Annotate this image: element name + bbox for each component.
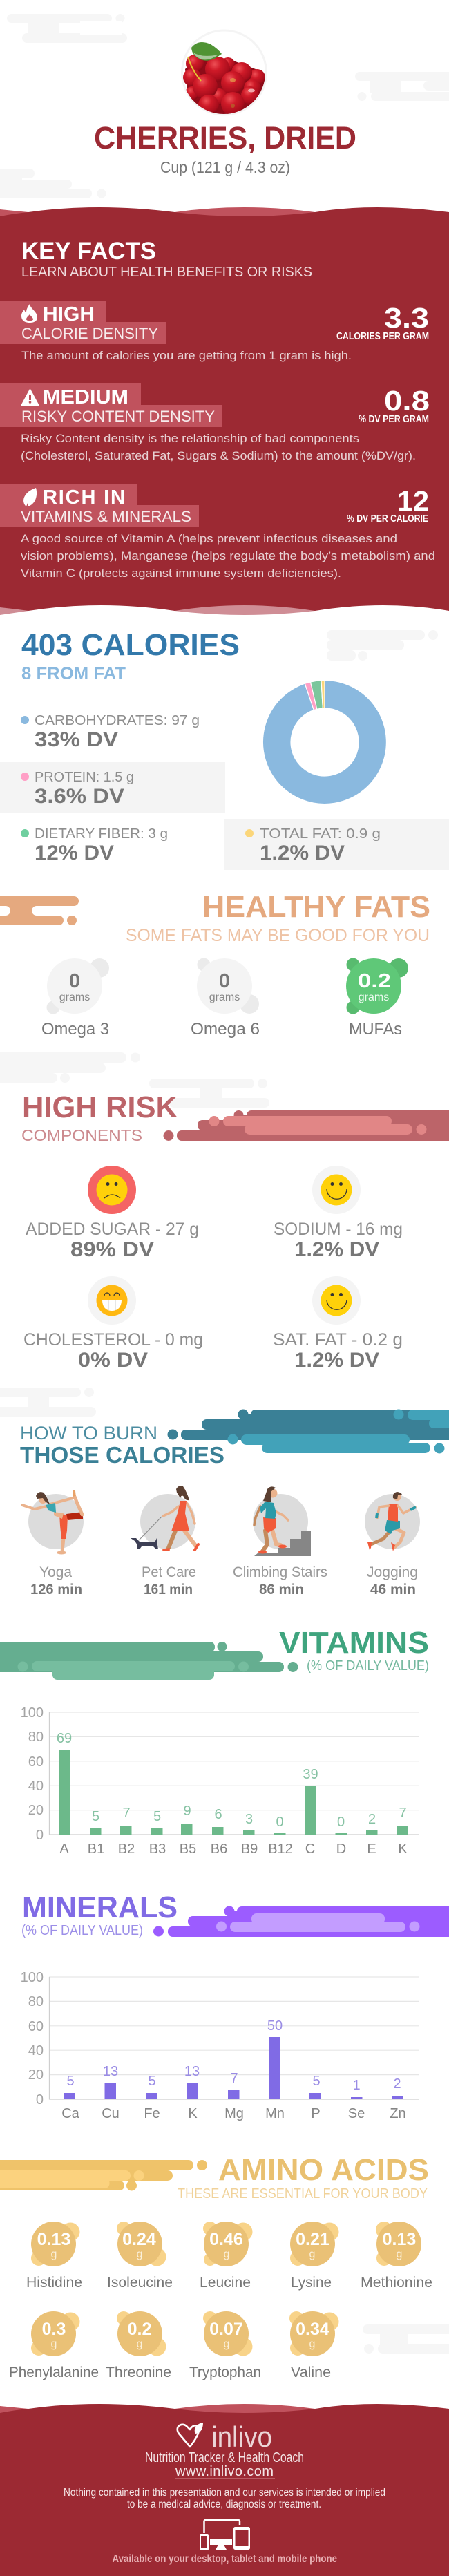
activity label: jogging [367,1564,418,1598]
amino acid: phenylalanine: g [51,2338,57,2350]
activity label: climbing stairs: Climbing Stairs [233,1564,327,1580]
fact: rich in vitamins and minerals: % DV PER CALORIE [347,513,428,524]
bar chart: minerals: 5 [66,2074,75,2089]
availability note: Available on your desktop, tablet and mobile phone [112,2553,337,2565]
fat item: MUFAs [346,958,408,1039]
fact: rich in vitamins and minerals: 12 [397,485,429,517]
legend: protein: PROTEIN: 1.5 g [35,770,134,785]
bar chart: minerals: Zn [390,2106,406,2121]
fact: calorie density: CALORIES PER GRAM [336,331,429,342]
heading: amino acids: AMINO ACIDS [218,2153,429,2187]
bar chart: minerals [21,1970,419,2121]
bar chart: vitamins: 5 [153,1809,161,1824]
risk item: added sugar: 89% DV [70,1238,154,1261]
amino acid: valine [289,2311,338,2380]
icon: flame [21,304,37,323]
amino acid: phenylalanine: 0.3 [42,2320,66,2339]
heading: key facts: KEY FACTS [21,238,156,265]
bar chart: vitamins: 7 [399,1806,407,1821]
activity: pet care [131,1486,198,1551]
bar chart: minerals: 60 [28,2019,44,2034]
fact: rich in vitamins and minerals: A good source of Vitamin A (helps prevent infectious diseases and [21,532,397,545]
bar chart: vitamins: 0 [337,1815,345,1830]
icon: desktop, tablet and phone [200,2520,250,2550]
heading: high risk: HIGH RISK [22,1090,178,1124]
disclaimer: to be a medical advice, diagnosis or treatment. [127,2499,321,2510]
fat item: omega 6 [191,958,260,1039]
fat item: omega 3 [41,958,109,1039]
bar chart: vitamins: E [367,1841,376,1857]
bar chart: vitamins: 5 [92,1809,99,1824]
heading: those calories: THOSE CALORIES [20,1442,224,1468]
subheading: calories from fat: 8 FROM FAT [21,664,126,683]
subheading: components: COMPONENTS [21,1126,142,1144]
amino acid: lysine: g [309,2248,315,2260]
subheading: minerals percent of daily value: (% OF DAILY VALUE) [21,1923,143,1938]
risk item: cholesterol: 0% DV [78,1349,148,1372]
tagline: Nutrition Tracker & Health Coach [145,2450,304,2465]
legend: dietary fiber [21,826,168,864]
fact: risky content density: Risky Content density is the relationship of bad components [21,432,359,445]
bar chart: vitamins: B6 [211,1841,227,1857]
amino acid: tryptophan: g [224,2338,229,2350]
subheading: key facts: LEARN ABOUT HEALTH BENEFITS OR RISKS [21,265,312,280]
bar chart: vitamins: 7 [122,1806,131,1821]
fact: calorie density: HIGH [43,303,95,325]
icon: leaf [23,488,37,506]
bar chart: minerals: Mg [224,2106,244,2121]
amino acid: lysine: Lysine [291,2275,332,2291]
fat item: MUFAs: 0.2 [358,970,391,992]
amino acid: leucine: 0.46 [209,2230,243,2249]
amino acid: leucine [200,2222,253,2291]
panel: key facts [0,207,449,615]
bar chart: minerals: Cu [102,2106,120,2121]
activity: climbing stairs [253,1486,311,1556]
fact: rich in vitamins and minerals: vision problems), Manganese (helps regulate the body’s metabolism) and [21,549,435,562]
fact: risky content density: % DV PER GRAM [359,414,429,425]
fat item: omega 3: Omega 3 [41,1020,109,1039]
fat item: MUFAs: grams [359,992,389,1003]
amino acid: tryptophan [189,2311,261,2380]
fact: rich in vitamins and minerals [0,484,435,580]
legend: total fat: 1.2% DV [260,842,345,864]
donut chart: macronutrients [262,680,386,804]
bar chart: vitamins: 0 [36,1828,44,1843]
legend: protein: 3.6% DV [35,785,124,808]
bar chart: minerals: P [311,2106,321,2121]
fact: rich in vitamins and minerals: Vitamin C (protects against immune system deficiencies). [21,567,341,580]
heading: calories: 403 CALORIES [21,628,240,662]
disclaimer: Nothing contained in this presentation and our services is intended or implied [64,2487,385,2499]
decoration: amino acids bars [0,2160,207,2190]
decoration: high risk bars [163,1110,449,1141]
heading: healthy fats: HEALTHY FATS [202,890,430,924]
bar chart: minerals: 2 [393,2076,401,2092]
amino acid: valine: Valine [291,2365,331,2380]
decoration: vitamins bars [0,1642,298,1680]
logo: inlivo: inlivo [211,2421,272,2453]
amino acid: tryptophan: Tryptophan [189,2365,261,2380]
bar chart: vitamins: 60 [28,1754,44,1770]
activity label: climbing stairs: 86 min [259,1582,304,1598]
amino acid: histidine: 0.13 [37,2230,70,2249]
risk item: saturated fat: 1.2% DV [294,1349,379,1372]
bar chart: minerals: 0 [36,2092,44,2108]
bar chart: vitamins: 39 [303,1767,318,1782]
amino acid: isoleucine: g [137,2248,142,2260]
bar chart: minerals: 100 [21,1970,44,1985]
fat item: MUFAs: MUFAs [349,1020,402,1039]
activity label: yoga: Yoga [39,1564,72,1580]
bar chart: vitamins: 100 [21,1705,44,1721]
legend: carbohydrates: 33% DV [35,728,118,751]
amino acid: lysine [290,2222,338,2291]
heading: how to burn: HOW TO BURN [20,1423,157,1443]
amino acid: isoleucine: Isoleucine [107,2275,173,2291]
decoration: healthy fats bar [0,896,79,925]
amino acid: histidine: g [51,2248,57,2260]
bar chart: vitamins: K [398,1841,408,1857]
risk item: cholesterol: CHOLESTEROL - 0 mg [23,1330,203,1349]
activity: yoga [22,1491,84,1555]
activity label: jogging: 46 min [370,1582,416,1598]
bar chart: minerals: 40 [28,2043,44,2058]
amino acid: valine: g [309,2338,315,2350]
serving size: Cup (121 g / 4.3 oz) [160,158,290,176]
bar chart: vitamins: 20 [28,1803,44,1818]
bar chart: vitamins: B5 [180,1841,196,1857]
fact: rich in vitamins and minerals: RICH IN [43,486,125,509]
bar chart: minerals: 13 [103,2064,118,2079]
bar chart: vitamins: B2 [118,1841,135,1857]
bar chart: vitamins: B1 [88,1841,104,1857]
bar chart: vitamins: 6 [214,1807,222,1822]
decoration: minerals bars [153,1906,449,1937]
bar chart: minerals: K [188,2106,198,2121]
activity label: climbing stairs [233,1564,327,1598]
fact: risky content density: RISKY CONTENT DENSITY [21,408,215,425]
amino acid: tryptophan: 0.07 [209,2320,243,2339]
amino acid: methionine [361,2222,432,2291]
heading: minerals: MINERALS [22,1891,178,1924]
amino acid: leucine: g [224,2248,229,2260]
bar chart: minerals: 13 [184,2064,200,2079]
legend: dietary fiber: 12% DV [35,842,114,864]
legend: carbohydrates [21,713,200,751]
activity label: yoga [30,1564,82,1598]
fat item: omega 6: grams [209,992,240,1003]
bar chart: minerals: 50 [267,2018,283,2034]
activity label: pet care: 161 min [144,1582,193,1598]
amino acid: threonine: g [137,2338,142,2350]
illustration: cherries in a circle [182,30,267,116]
bar chart: vitamins: B9 [241,1841,258,1857]
risk item: saturated fat [273,1276,403,1372]
bar chart: vitamins: 2 [368,1812,376,1827]
amino acid: histidine [26,2222,82,2291]
amino acid: threonine [106,2311,171,2380]
amino acid: leucine: Leucine [200,2275,251,2291]
legend: total fat: TOTAL FAT: 0.9 g [260,826,381,842]
activity label: pet care: Pet Care [142,1564,196,1580]
bar chart: minerals: 7 [230,2071,238,2086]
bar chart: vitamins: A [59,1841,69,1857]
fat item: omega 6: Omega 6 [191,1020,260,1039]
risk item: added sugar: ADDED SUGAR - 27 g [26,1220,199,1239]
fat item: omega 6: 0 [219,970,230,992]
panel: footer [0,2404,449,2576]
bar chart: vitamins: 69 [57,1731,72,1746]
legend: total fat [224,819,449,870]
bar chart: vitamins [21,1705,419,1857]
bar chart: minerals: 1 [352,2078,361,2093]
fact: risky content density: MEDIUM [43,386,128,408]
bar chart: minerals: Fe [144,2106,160,2121]
bar chart: minerals: 80 [28,1994,44,2009]
bar chart: vitamins: 9 [183,1803,191,1819]
amino acid: isoleucine [107,2222,173,2291]
fact: rich in vitamins and minerals: VITAMINS & MINERALS [21,508,191,525]
activity label: jogging: Jogging [367,1564,418,1580]
fact: calorie density [0,301,429,362]
activity label: pet care [142,1564,196,1598]
bar chart: minerals: 5 [148,2074,156,2089]
fat item: omega 3: grams [59,992,90,1003]
icon: warning triangle [21,388,39,406]
fact: risky content density: 0.8 [384,385,430,417]
fact: risky content density [0,383,430,462]
amino acid: methionine: 0.13 [383,2230,416,2249]
bar chart: vitamins: 0 [276,1815,284,1830]
amino acid: methionine: g [397,2248,402,2260]
risk item: saturated fat: SAT. FAT - 0.2 g [273,1330,403,1349]
fact: risky content density: (Cholesterol, Saturated Fat, Sugars & Sodium) to the amount (%DV/gr). [21,449,416,462]
disclaimer [64,2487,385,2510]
risk item: sodium: SODIUM - 16 mg [274,1220,403,1239]
legend: carbohydrates: CARBOHYDRATES: 97 g [35,713,200,728]
bar chart: vitamins: 40 [28,1779,44,1794]
amino acid: histidine: Histidine [26,2275,82,2291]
subheading: vitamins percent of daily value: (% OF DAILY VALUE) [307,1658,429,1674]
risk item: added sugar [26,1166,199,1261]
bar chart: vitamins: 3 [245,1812,253,1827]
bar chart: vitamins: 80 [28,1730,44,1745]
amino acid: phenylalanine: Phenylalanine [9,2365,99,2380]
bar chart: minerals: Ca [61,2106,80,2121]
amino acid: valine: 0.34 [296,2320,329,2339]
title: CHERRIES, DRIED [94,120,356,155]
amino acid: methionine: Methionine [361,2275,432,2291]
fact: calorie density: 3.3 [384,302,429,334]
decoration: burn calories bars [167,1410,449,1454]
logo: inlivo [178,2421,272,2453]
bar chart: minerals: Se [348,2106,365,2121]
risk item: sodium: 1.2% DV [294,1238,379,1261]
amino acid: phenylalanine [9,2311,99,2380]
bar chart: vitamins: B3 [149,1841,166,1857]
heading: vitamins: VITAMINS [279,1626,429,1660]
amino acid: lysine: 0.21 [296,2230,329,2249]
bar chart: minerals: Mn [265,2106,285,2121]
bar chart: minerals: 5 [312,2074,321,2089]
bar chart: vitamins: B12 [268,1841,293,1857]
activity label: yoga: 126 min [30,1582,82,1598]
amino acid: isoleucine: 0.24 [122,2230,156,2249]
bar chart: vitamins: C [305,1841,315,1857]
risk item: sodium [274,1166,403,1261]
fact: calorie density: CALORIE DENSITY [21,325,158,342]
subheading: healthy fats: SOME FATS MAY BE GOOD FOR YOU [126,926,430,945]
website link: www.inlivo.com [175,2464,274,2479]
bar chart: vitamins: D [336,1841,346,1857]
legend: dietary fiber: DIETARY FIBER: 3 g [35,826,168,842]
bar chart: minerals: 20 [28,2067,44,2083]
legend: protein [0,762,225,813]
fat item: omega 3: 0 [69,970,80,992]
risk item: cholesterol [23,1276,203,1372]
amino acid: threonine: Threonine [106,2365,171,2380]
activity: jogging [365,1492,420,1551]
fact: calorie density: The amount of calories you are getting from 1 gram is high. [21,349,352,362]
amino acid: threonine: 0.2 [128,2320,151,2339]
